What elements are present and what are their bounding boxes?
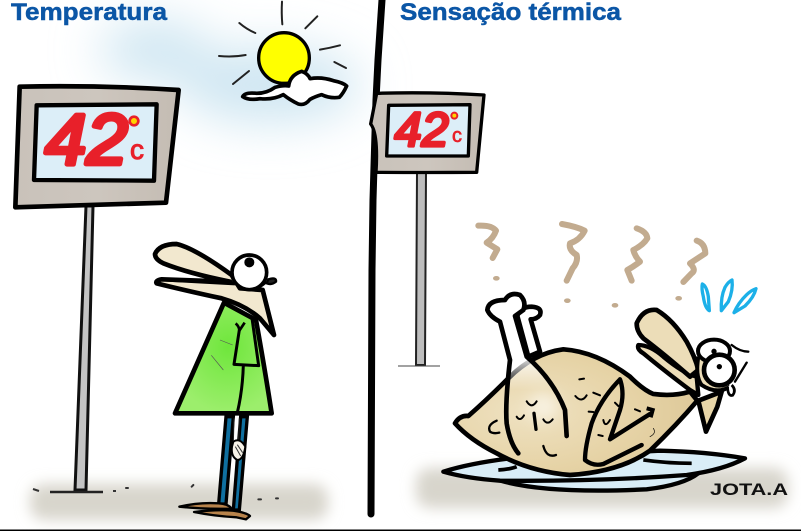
unit: c — [130, 134, 144, 165]
degree mark — [130, 117, 138, 125]
head and beak — [155, 244, 276, 335]
sweat drops — [702, 280, 756, 313]
eye — [232, 255, 267, 290]
sun with rays and cloud — [219, 2, 347, 104]
unit: c — [452, 125, 462, 147]
temperature value: 42 — [45, 100, 128, 180]
sun disc — [259, 33, 309, 83]
brow and nostril — [732, 345, 748, 382]
ground shadow: left — [30, 484, 328, 520]
divider line — [371, 0, 382, 514]
bottom border — [0, 530, 801, 531]
right sign pole — [398, 172, 440, 366]
legs — [219, 417, 247, 510]
head and beak — [637, 310, 748, 432]
sleeve and seam — [234, 318, 259, 413]
steam wisps — [478, 224, 705, 282]
signature: JOTA.A — [710, 480, 788, 499]
man looking up — [126, 244, 278, 519]
ground shadow: right — [416, 468, 788, 508]
chicken body — [455, 349, 697, 475]
left sign pole — [33, 206, 128, 492]
sign frame — [371, 93, 484, 172]
cloud — [243, 71, 347, 104]
sign screen — [34, 104, 157, 181]
right temperature sign — [371, 93, 484, 172]
green coat — [175, 303, 272, 413]
sky glow — [100, 20, 360, 123]
far leg bone — [517, 307, 541, 357]
sign frame — [15, 86, 179, 207]
left temperature sign — [15, 86, 179, 207]
near leg — [487, 294, 560, 397]
wing — [585, 379, 650, 465]
temperature value: 42 — [395, 103, 449, 157]
degree mark — [451, 113, 457, 119]
skin marks — [489, 379, 654, 456]
roast chicken lying on plate — [443, 294, 748, 491]
body highlight — [528, 393, 558, 420]
plate — [443, 451, 745, 491]
ground specks — [126, 485, 278, 499]
feet — [179, 503, 250, 519]
eyes — [698, 340, 730, 362]
sign screen — [387, 105, 470, 156]
sun rays — [219, 2, 346, 84]
steam dots — [493, 276, 682, 308]
